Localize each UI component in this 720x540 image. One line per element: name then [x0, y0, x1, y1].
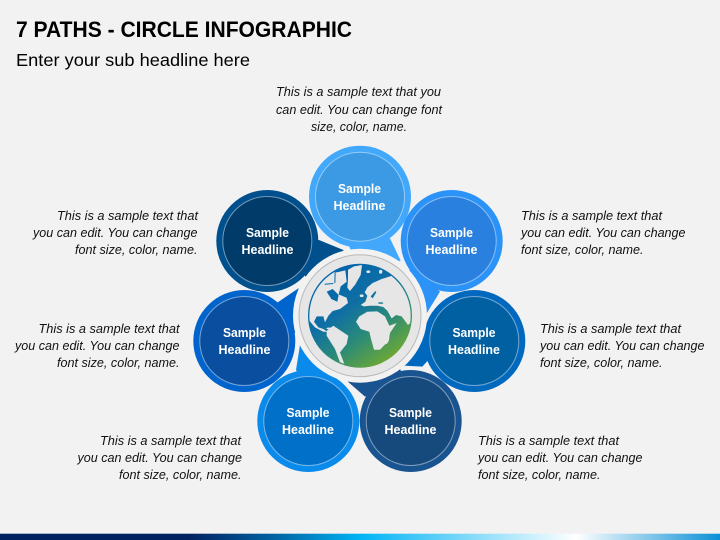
text block: lower left: This is a sample text that [100, 434, 242, 448]
path circle: top: Headline [334, 199, 386, 213]
text block: lower left: font size, color, name. [119, 468, 242, 482]
text block: lower left: you can edit. You can change [76, 451, 242, 465]
path circle: left: Sample [223, 326, 266, 340]
text block: upper left: you can edit. You can change [32, 226, 198, 240]
path circle: upper right: Sample [430, 226, 473, 240]
path circle: left: Headline [218, 343, 271, 357]
text block: lower left [76, 434, 242, 482]
path circle: upper left: Sample [246, 226, 289, 240]
hub: ring behind the globe [293, 249, 427, 383]
path circle: upper right: Headline [426, 243, 478, 257]
text block: upper left: font size, color, name. [75, 243, 198, 257]
text block: lower right: font size, color, name. [478, 468, 600, 482]
text block: upper left [32, 209, 199, 257]
text block: lower right: This is a sample text that [478, 434, 620, 448]
path circle: lower right: Headline [384, 423, 437, 437]
icon: inland seas on globe [325, 272, 383, 304]
text block: left: you can edit. You can change [14, 339, 180, 353]
path circle: upper right [401, 190, 503, 292]
text block: left: This is a sample text that [38, 322, 180, 336]
path circle: right: Headline [448, 343, 500, 357]
text block: upper right: font size, color, name. [521, 243, 644, 257]
text block: upper right [520, 209, 686, 257]
path circle: lower left: Headline [282, 423, 334, 437]
text block: lower right: you can edit. You can change [477, 451, 643, 465]
text block: top: This is a sample text that you [276, 85, 441, 99]
text block: upper right: you can edit. You can change [520, 226, 686, 240]
path circle: upper left: Headline [242, 243, 294, 257]
text block: left [14, 322, 180, 370]
text block: right: font size, color, name. [540, 356, 662, 370]
path circle: lower right [360, 370, 462, 472]
text block: top: can edit. You can change font [276, 103, 443, 117]
text block: right: This is a sample text that [540, 322, 682, 336]
text block: lower right [477, 434, 643, 482]
subtitle: Enter your sub headline here [16, 50, 250, 70]
text block: top [276, 85, 443, 134]
path circle: lower left: Sample [286, 406, 330, 420]
path circle: lower left [257, 370, 359, 472]
path circle: upper left [216, 190, 318, 292]
path circle: left [193, 290, 295, 392]
path circle: lower right: Sample [389, 406, 432, 420]
text block: top: size, color, name. [311, 120, 407, 134]
title: 7 PATHS - CIRCLE INFOGRAPHIC [16, 17, 352, 42]
text block: right [539, 322, 705, 370]
path circle: top: Sample [338, 182, 381, 196]
icon: globe [307, 264, 417, 368]
circle tails swirling round the hub [267, 238, 440, 397]
text block: upper right: This is a sample text that [521, 209, 663, 223]
path circle: right: Sample [452, 326, 496, 340]
text block: right: you can edit. You can change [539, 339, 705, 353]
text block: upper left: This is a sample text that [57, 209, 199, 223]
footer gradient bar [0, 534, 720, 540]
path circle: top [309, 146, 411, 248]
text block: left: font size, color, name. [57, 356, 180, 370]
path circle: right [423, 290, 525, 392]
